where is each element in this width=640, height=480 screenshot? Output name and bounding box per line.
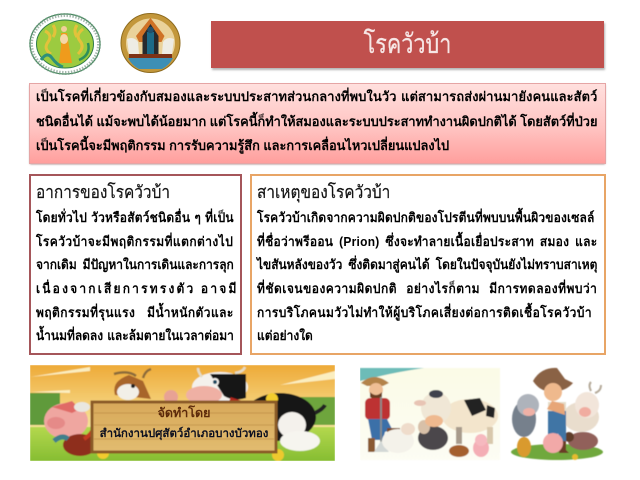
illustration: farm boy with animals: [510, 367, 604, 461]
definition line 3: เป็นโรคนี้จะมีพฤติกรรม การรับความรู้สึก และการเคลื่อนไหวเปลี่ยนแปลงไป: [36, 138, 449, 153]
sign organisation name: สำนักงานปศุสัตว์อำเภอบางบัวทอง: [100, 428, 268, 440]
causes paragraph: [256, 208, 597, 343]
symptoms paragraph: พฤติกรรมที่รุนแรง มีน้ำหนักตัวและ: [36, 305, 234, 320]
illustration: farmer with cow, sheep, dog and pig: [360, 367, 500, 460]
sign heading: จัดทำโดย: [158, 406, 210, 420]
panel: causes: [250, 174, 606, 355]
causes paragraph: แต่อย่างใด: [257, 328, 313, 343]
symptoms paragraph: จากเดิม มีปัญหาในการเดินและการลุก: [36, 257, 234, 272]
causes heading: สาเหตุของโรควัวบ้า: [257, 182, 390, 202]
title text: โรควัวบ้า: [364, 29, 451, 59]
definition line 1: เป็นโรคที่เกี่ยวข้องกับสมองและระบบประสาทส่วนกลางที่พบในวัว แต่สามารถส่งผ่านมายังคนและสัตว์: [36, 89, 597, 104]
causes paragraph: ที่ชื่อว่าพรีออน (Prion) ซึ่งจะทำลายเนื้อเยื่อประสาท สมอง และ: [257, 234, 597, 249]
symptoms paragraph: น้ำนมที่ลดลง และล้มตายในเวลาต่อมา: [36, 328, 234, 343]
causes paragraph: การบริโภคนมวัวไม่ทำให้ผู้บริโภคเสี่ยงต่อการติดเชื้อโรควัวบ้า: [257, 305, 592, 320]
definition line 2: ชนิดอื่นได้ แม้จะพบได้น้อยมาก แต่โรคนี้ก็ทำให้สมองและระบบประสาททำงานผิดปกติได้ โดยสัตว์ที่ป่วย: [36, 114, 597, 129]
symptoms paragraph: [36, 208, 239, 343]
logo: livestock department seal: [120, 13, 180, 73]
banner: farm animals with wooden sign: [30, 365, 335, 461]
causes paragraph: ไขสันหลังของวัว ซึ่งติดมาสู่คนได้ โดยในปัจจุบันยังไม่ทราบสาเหตุ: [257, 257, 597, 272]
title banner: [211, 21, 604, 68]
logo: agriculture department seal: [29, 13, 101, 75]
symptoms paragraph: โรควัวบ้าจะมีพฤติกรรมที่แตกต่างไป: [36, 234, 233, 249]
symptoms heading: อาการของโรควัวบ้า: [36, 182, 170, 202]
panel: symptoms: [29, 174, 242, 355]
causes paragraph: ที่ชัดเจนของความผิดปกติ อย่างไรก็ตาม มีการทดลองที่พบว่า: [257, 281, 597, 296]
symptoms paragraph: เนื่องจากเสียการทรงตัว อาจมี: [36, 281, 239, 296]
illustration: farm scene: [30, 365, 335, 461]
causes paragraph: โรควัวบ้าเกิดจากความผิดปกติของโปรตีนที่พบบนพื้นผิวของเซลล์: [257, 210, 595, 225]
panel: disease definition: [30, 84, 605, 163]
symptoms paragraph: โดยทั่วไป วัวหรือสัตว์ชนิดอื่น ๆ ที่เป็น: [36, 210, 234, 225]
